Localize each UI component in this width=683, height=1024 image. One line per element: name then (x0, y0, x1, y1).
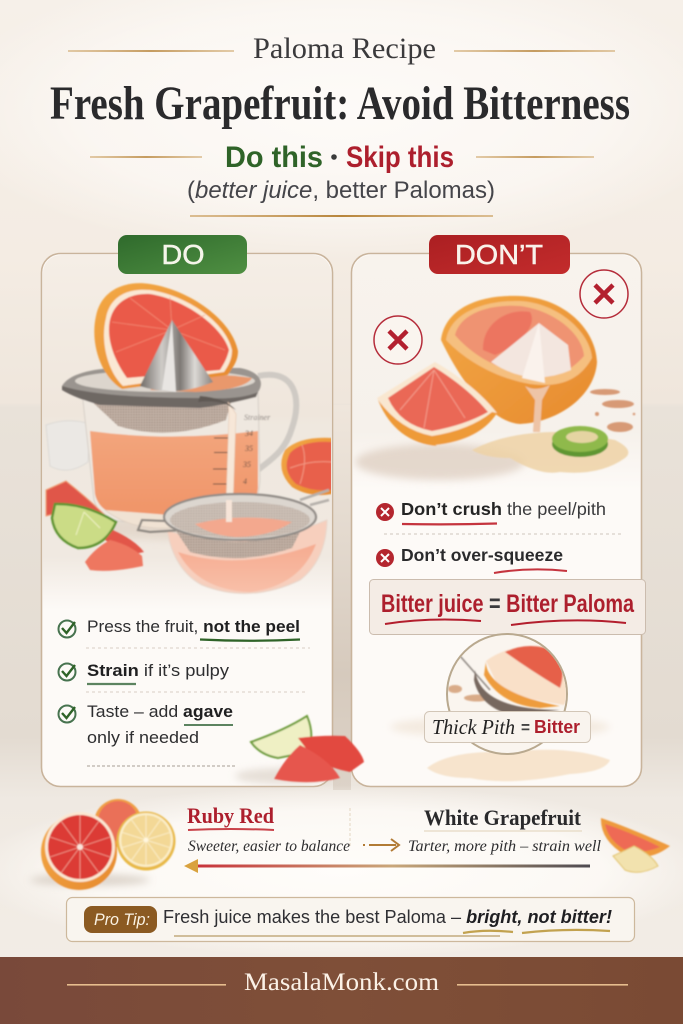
white grapefruit column: White Grapefruit (424, 805, 582, 830)
photo: crushed grapefruit (353, 255, 640, 490)
jar handle (258, 375, 296, 470)
subheading: do this / skip this: Skip this (346, 141, 454, 174)
white grapefruit column: Tarter, more pith – strain well (408, 838, 602, 855)
sieve under juicer (94, 402, 231, 434)
photo: juicing grapefruit: 34 (244, 429, 253, 438)
subheading: do this / skip this (90, 141, 594, 174)
jalapeno slice (551, 441, 609, 458)
tip: strain: Strain if it’s pulpy (87, 661, 230, 680)
label: thick pith: = (521, 719, 530, 737)
half grapefruit (94, 283, 238, 389)
juicer cone (140, 320, 213, 391)
juice stream (226, 402, 236, 505)
lime wedge (52, 504, 116, 548)
pro tip bar: Fresh juice makes the best Paloma – bright, not bitter! (163, 907, 612, 927)
photo: juicing grapefruit (43, 255, 332, 610)
label: thick pith (424, 712, 590, 742)
panel: don't (352, 235, 646, 786)
spice crumbs (590, 389, 635, 432)
fruit wedges: right (601, 818, 670, 872)
juice spill (472, 432, 628, 473)
grapefruit wedge (377, 362, 497, 445)
juicer plate (62, 368, 261, 400)
x icon: left (374, 316, 422, 364)
comparison fruit: ruby and white (30, 799, 176, 890)
badge: DON'T (429, 235, 570, 274)
photo: juicing grapefruit: 4 (243, 477, 247, 486)
small glass dish (46, 421, 90, 470)
tagline: (better juice, better Palomas) (187, 177, 495, 204)
callout: bitter juice: Bitter juice = Bitter Paloma (381, 590, 635, 618)
right grapefruit half (281, 438, 332, 495)
photo: juicing grapefruit: 35 (242, 460, 251, 469)
tip: taste: Taste – add agave (87, 702, 233, 721)
warning: don't over-squeeze: Don’t over-squeeze (401, 545, 563, 565)
pulp drip (525, 385, 550, 432)
garnish: lime and grapefruit (235, 716, 364, 784)
pro tip pill (84, 906, 157, 933)
measure marks (213, 438, 228, 484)
tip: press the fruit: Press the fruit, not the peel (87, 617, 300, 636)
subtitle: Paloma Recipe: Paloma Recipe (253, 32, 436, 65)
label: thick pith: Bitter (534, 717, 580, 737)
pro tip bar (66, 898, 634, 942)
glass bowl (167, 520, 327, 593)
ruby red column: Sweeter, easier to balance (188, 838, 350, 855)
white grapefruit column (408, 805, 602, 855)
warning: don't over-squeeze (376, 545, 567, 573)
arrow: to white (363, 839, 399, 851)
crushed half grapefruit (441, 296, 597, 424)
shadow and stains (355, 444, 525, 480)
tip: taste (58, 702, 233, 747)
ruby red column (187, 803, 350, 855)
left wedge (46, 481, 108, 518)
arrow: to ruby (184, 859, 590, 873)
grapefruit chunks (105, 530, 144, 555)
footer (0, 957, 683, 1024)
tip: strain (58, 661, 230, 684)
spout (198, 396, 236, 410)
warning: don't crush: Don’t crush the peel/pith (401, 499, 606, 519)
footer: MasalaMonk.com (244, 969, 440, 996)
label: thick pith: Thick Pith (432, 715, 515, 739)
strainer handle (138, 520, 184, 532)
callout: bitter juice (370, 580, 646, 634)
pith closeup circle (447, 634, 567, 754)
panel: do (42, 235, 332, 786)
badge: DO: DO (162, 239, 204, 270)
jar shadow (114, 522, 172, 540)
x icon: right (580, 270, 628, 318)
badge: DON'T: DON’T (455, 239, 543, 270)
badge: DO (118, 235, 247, 274)
photo: juicing grapefruit: 35 (244, 444, 253, 453)
tip: taste: only if needed (87, 728, 199, 747)
warning: don't crush (376, 499, 606, 524)
subheading: do this / skip this: Do this (225, 141, 323, 174)
measuring jar (82, 392, 260, 522)
ruby red column: Ruby Red (187, 803, 274, 828)
white reamer cone (491, 323, 571, 377)
stream into strainer (226, 500, 232, 522)
pro tip pill: Pro Tip: (94, 910, 150, 929)
small strainer (176, 531, 300, 559)
stain under pith (390, 716, 610, 781)
photo: juicing grapefruit: Strainer (244, 413, 271, 422)
